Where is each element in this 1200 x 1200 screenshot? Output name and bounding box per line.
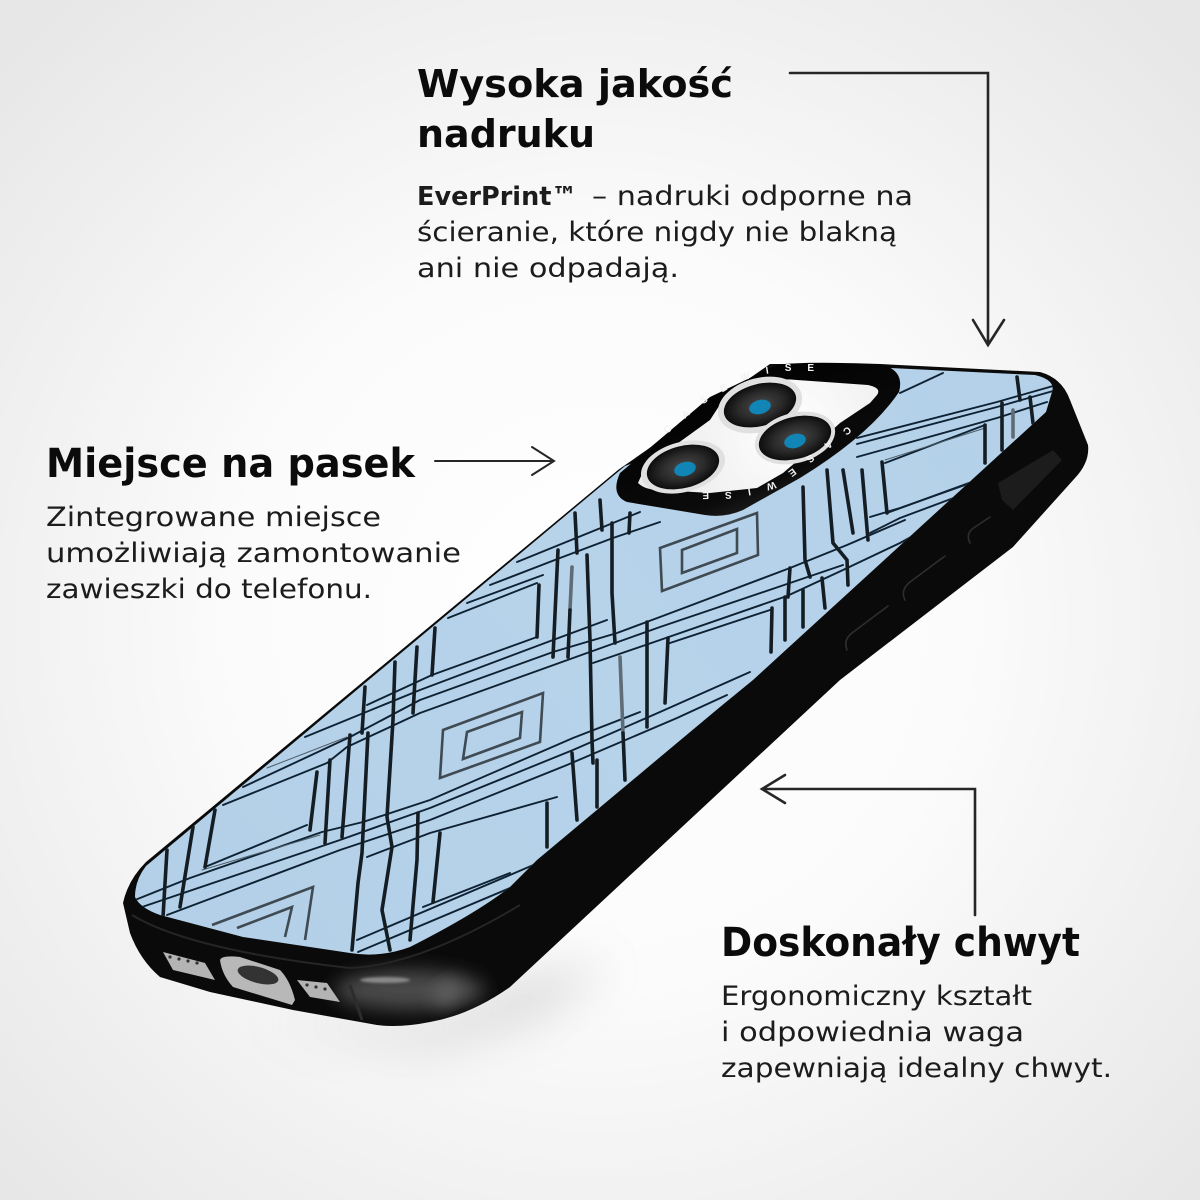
ring lettering: CASEWISE — [664, 364, 814, 432]
phone shadow — [260, 965, 610, 1048]
body text: i odpowiednia waga — [721, 1017, 1024, 1048]
callout: print quality — [417, 62, 913, 284]
body text: zawieszki do telefonu. — [46, 574, 372, 605]
heading: Wysoka jakość — [417, 62, 733, 106]
heading: nadruku — [417, 112, 595, 156]
lenses — [635, 368, 841, 502]
diamond rectangles — [212, 513, 758, 940]
heading: Miejsce na pasek — [46, 441, 416, 487]
body text — [417, 181, 913, 284]
body text: zapewniają idealny chwyt. — [721, 1053, 1112, 1084]
case highlights — [132, 905, 520, 1020]
long lines — [135, 373, 1053, 952]
callout: strap slot — [46, 441, 461, 605]
arrow: to strap slot — [435, 447, 554, 475]
body text: Ergonomiczny kształt — [721, 981, 1032, 1012]
heading — [417, 62, 733, 156]
bottom speaker left — [163, 952, 215, 980]
ring lettering: CASEWISE — [702, 427, 851, 500]
ring lettering — [664, 364, 851, 500]
charging port — [220, 956, 295, 1005]
case body — [123, 364, 1088, 1026]
camera window — [638, 379, 878, 493]
body text: umożliwiają zamontowanie — [46, 538, 461, 569]
body text: EverPrint™ — [417, 182, 577, 212]
body text: ścieranie, które nigdy nie blakną — [417, 217, 897, 248]
arrow: to top of case — [790, 73, 1004, 345]
side buttons — [846, 450, 1062, 650]
body text: – nadruki odporne na — [592, 181, 913, 212]
plaid pattern — [135, 373, 1053, 952]
body text: ani nie odpadają. — [417, 253, 679, 284]
cross strokes — [163, 377, 1033, 950]
heading: Doskonały chwyt — [721, 920, 1080, 966]
body text — [721, 981, 1112, 1084]
callout: grip — [721, 920, 1112, 1084]
body text: Zintegrowane miejsce — [46, 502, 381, 533]
camera ring — [616, 363, 900, 516]
bottom speaker right — [297, 980, 340, 1002]
body text — [46, 502, 461, 605]
printed back panel — [135, 368, 1053, 955]
arrow: to grip side — [762, 775, 975, 915]
phone case illustration — [123, 362, 1088, 1026]
